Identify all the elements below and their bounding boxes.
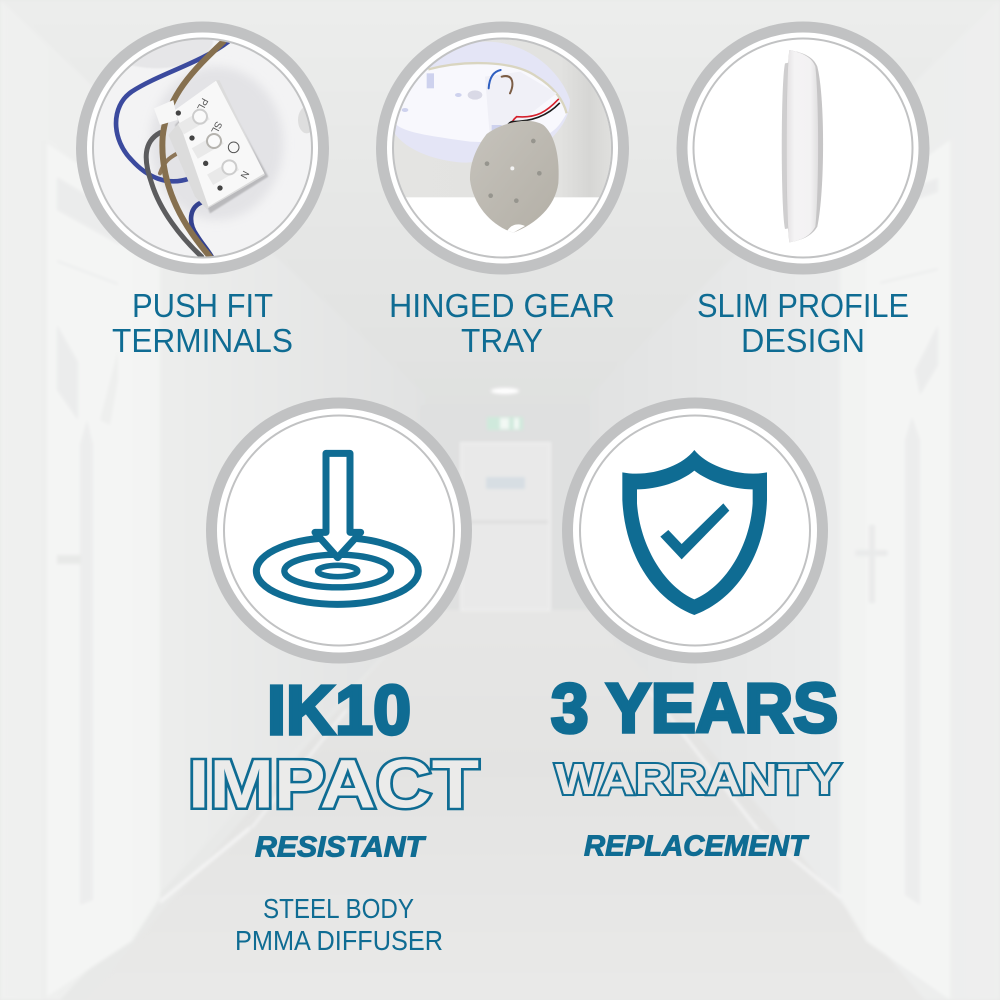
- circle: impact icon: [206, 398, 472, 664]
- label: push fit terminals: [112, 287, 293, 359]
- circle: slim profile photo: [676, 22, 930, 274]
- exit sign: [487, 417, 523, 430]
- wires: [116, 42, 228, 257]
- floor reflections: [250, 690, 760, 830]
- label: hinged gear tray: HINGED GEAR: [389, 287, 615, 324]
- label: slim profile design: SLIM PROFILE: [697, 287, 909, 324]
- wires: [488, 69, 560, 124]
- terminal block: [154, 80, 268, 213]
- circle: hinged gear tray photo: [376, 22, 629, 274]
- label: slim profile design: [697, 287, 909, 359]
- text: materials: PMMA DIFFUSER: [235, 925, 443, 956]
- label: push fit terminals: PUSH FIT: [132, 287, 273, 324]
- heading: 3 YEARS: 3 YEARS: [551, 669, 838, 747]
- ceiling light: [491, 388, 519, 394]
- terminal block: PL: [194, 96, 210, 112]
- tray plate: [470, 121, 559, 233]
- text: materials: STEEL BODY: [263, 893, 414, 924]
- circle: push fit terminals photo: [76, 12, 329, 274]
- label: slim profile design: DESIGN: [741, 322, 865, 359]
- text: materials: [235, 893, 443, 956]
- right door and frame: [760, 140, 954, 1000]
- terminal block: N: [238, 169, 251, 180]
- heading: WARRANTY outlined: WARRANTY: [555, 755, 841, 804]
- icon: arrow striking target: [256, 453, 418, 604]
- lamp base: [390, 42, 570, 163]
- lamp side view: [782, 50, 823, 242]
- heading: IK10: IK10: [267, 671, 411, 749]
- subheading: RESISTANT: RESISTANT: [255, 832, 427, 864]
- label: hinged gear tray: [389, 287, 615, 359]
- heading: IMPACT outlined: IMPACT: [188, 746, 479, 822]
- label: push fit terminals: TERMINALS: [112, 322, 293, 359]
- terminal block: SL: [208, 119, 224, 136]
- circle: warranty shield icon: [562, 398, 828, 664]
- left door and frame: [42, 140, 250, 1000]
- icon: shield with check: [622, 450, 767, 615]
- subheading: REPLACEMENT: REPLACEMENT: [584, 830, 810, 862]
- label: hinged gear tray: TRAY: [461, 322, 543, 359]
- end door: [461, 443, 550, 610]
